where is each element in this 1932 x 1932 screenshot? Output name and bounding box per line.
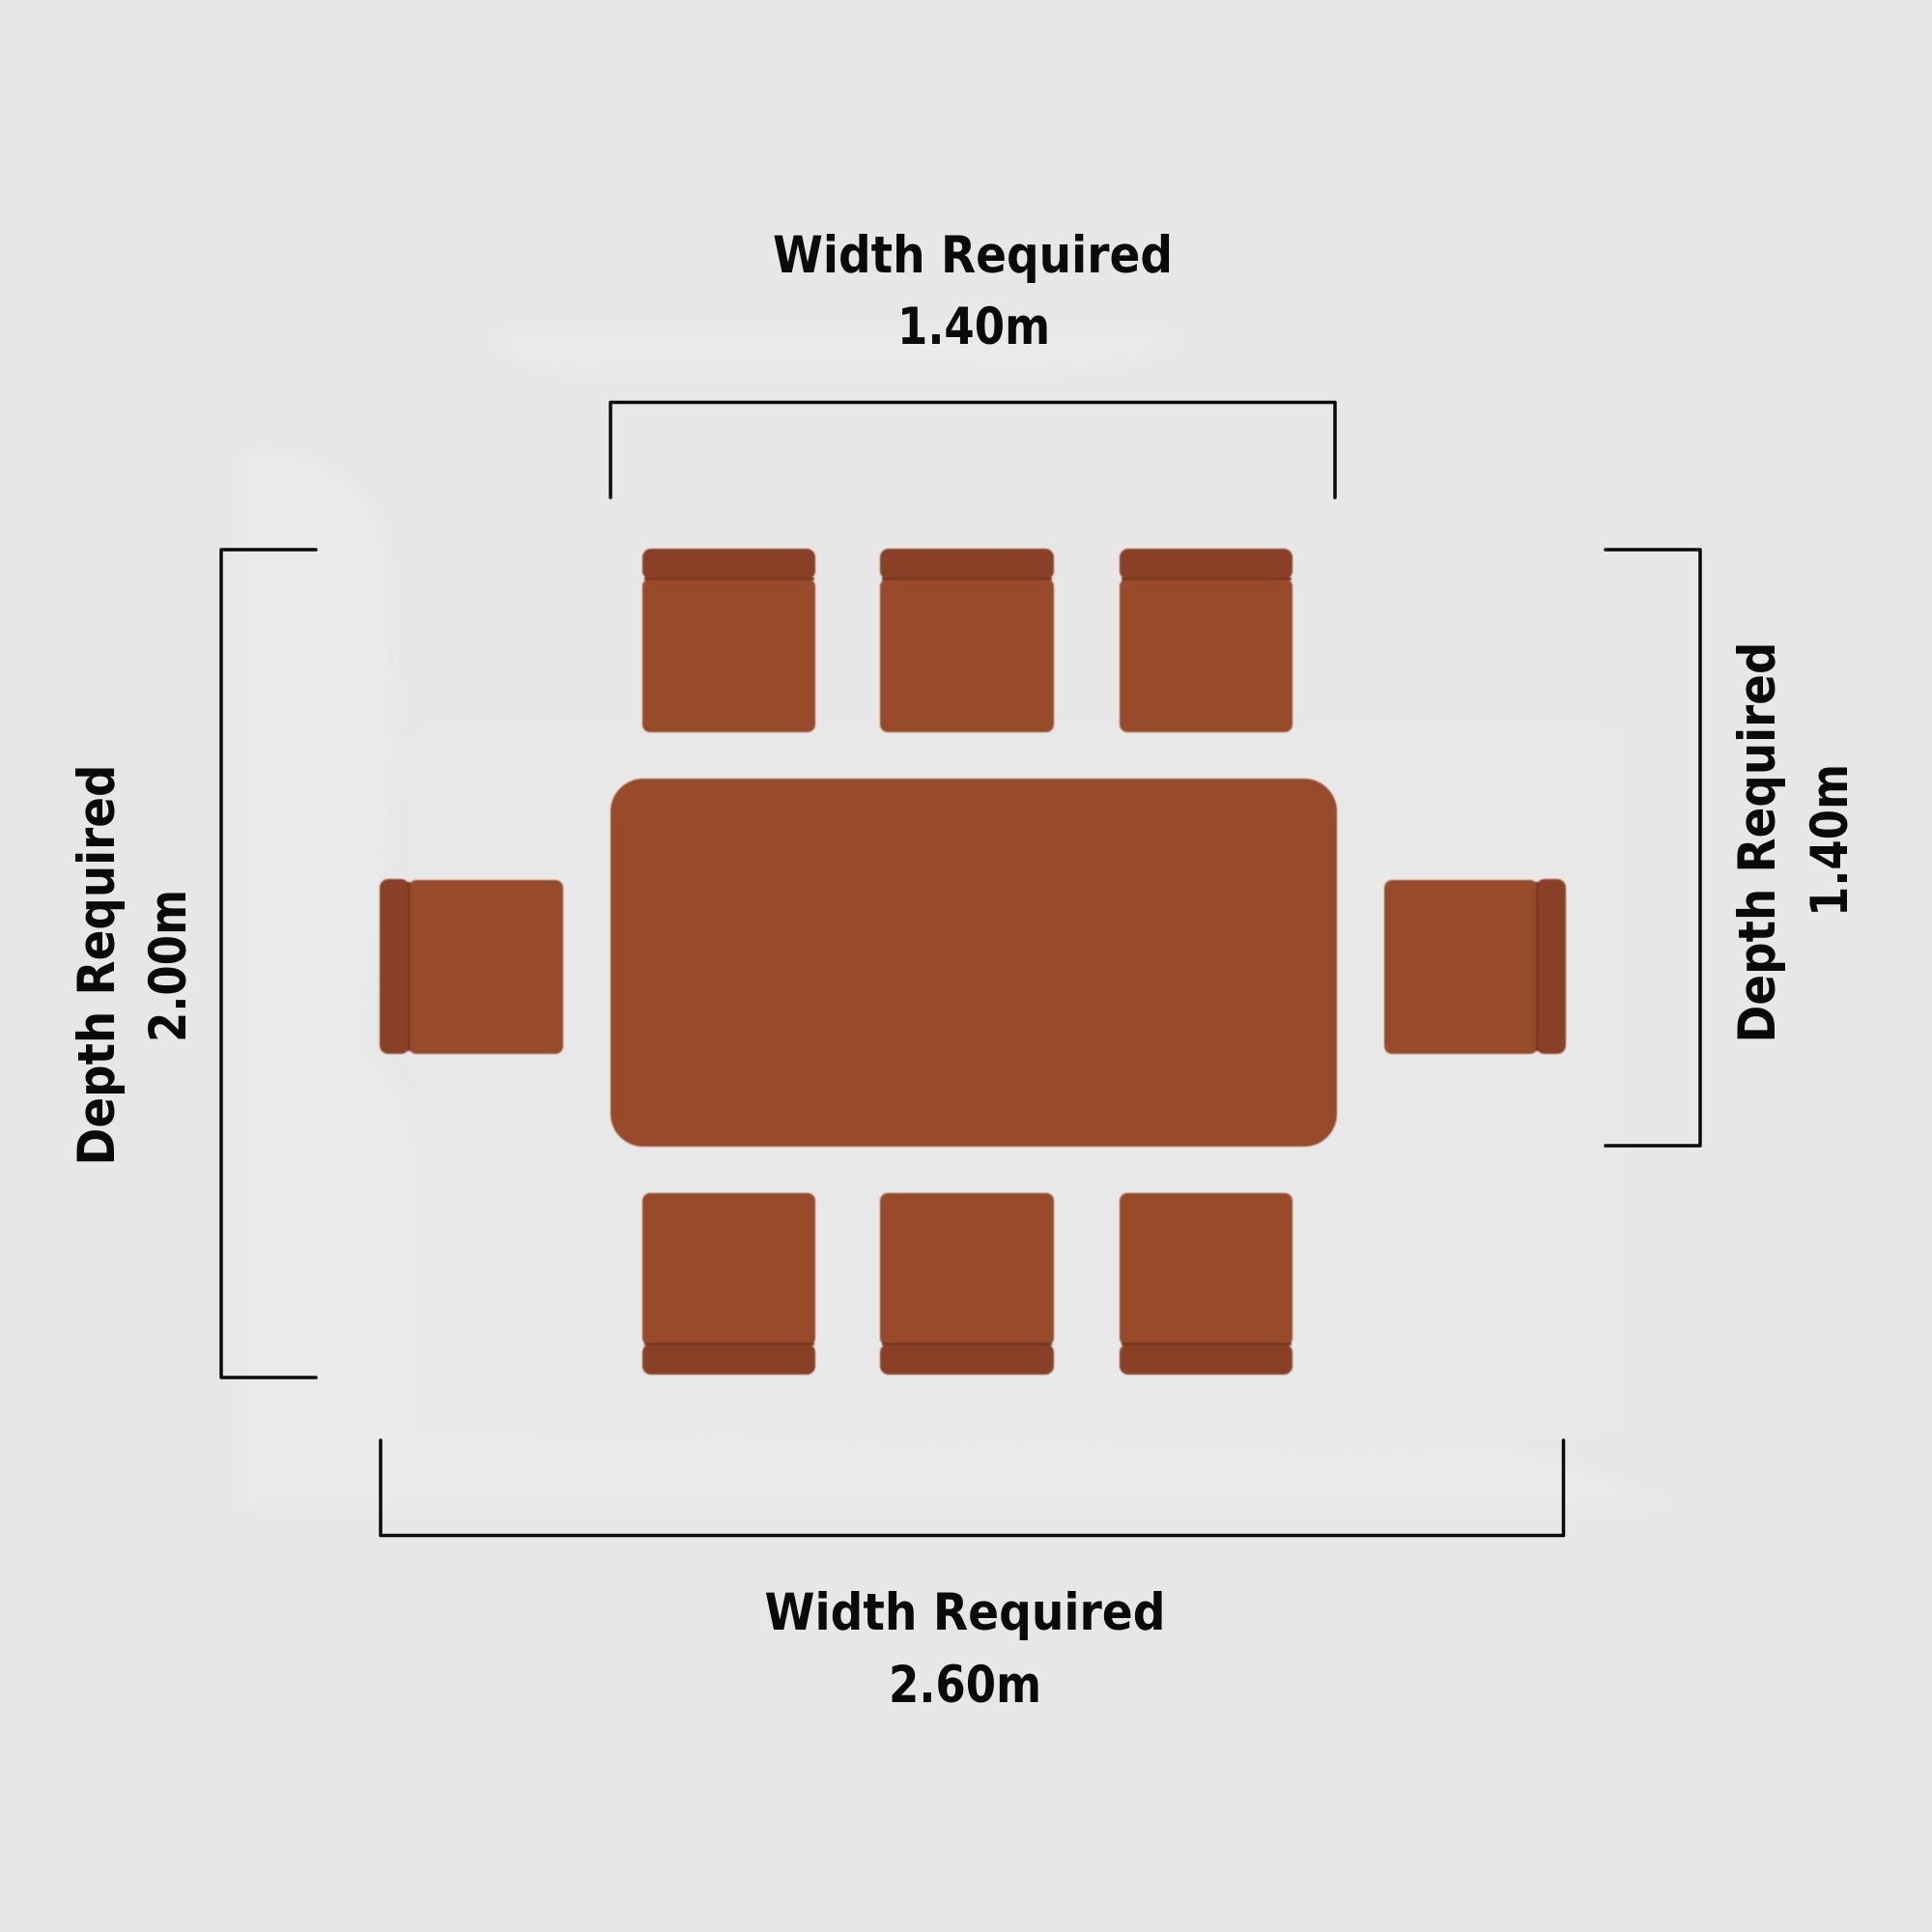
chair: top right: [1120, 549, 1293, 732]
label: bottom width required: [765, 1583, 1165, 1715]
label: right depth required: [1728, 641, 1860, 1043]
label: bottom width required: Width Required: [765, 1583, 1165, 1642]
bracket: left depth: [221, 550, 316, 1378]
chair: top middle: [880, 549, 1054, 732]
label: top width required: Width Required: [773, 226, 1173, 285]
chair: right end: [1384, 879, 1566, 1054]
label: top width required: [773, 226, 1173, 356]
bracket: top width: [611, 402, 1335, 497]
chair: top left: [642, 549, 815, 732]
label: left depth required: [68, 765, 198, 1165]
chair: bottom middle: [880, 1193, 1054, 1375]
chair: left end: [380, 879, 563, 1054]
bracket: right depth: [1605, 550, 1700, 1146]
chair: bottom left: [642, 1193, 815, 1375]
label: top width required: 1.40m: [897, 298, 1050, 356]
chairs: top row: [642, 549, 1293, 732]
bracket: bottom width: [381, 1440, 1563, 1536]
chairs: bottom row: [642, 1193, 1293, 1375]
label: left depth required: 2.00m: [139, 890, 198, 1042]
label: bottom width required: 2.60m: [889, 1656, 1041, 1715]
dining table: [611, 779, 1337, 1147]
label: right depth required: Depth Required: [1728, 641, 1787, 1043]
chair: bottom right: [1120, 1193, 1293, 1375]
label: right depth required: 1.40m: [1801, 764, 1860, 917]
label: left depth required: Depth Required: [68, 765, 127, 1165]
